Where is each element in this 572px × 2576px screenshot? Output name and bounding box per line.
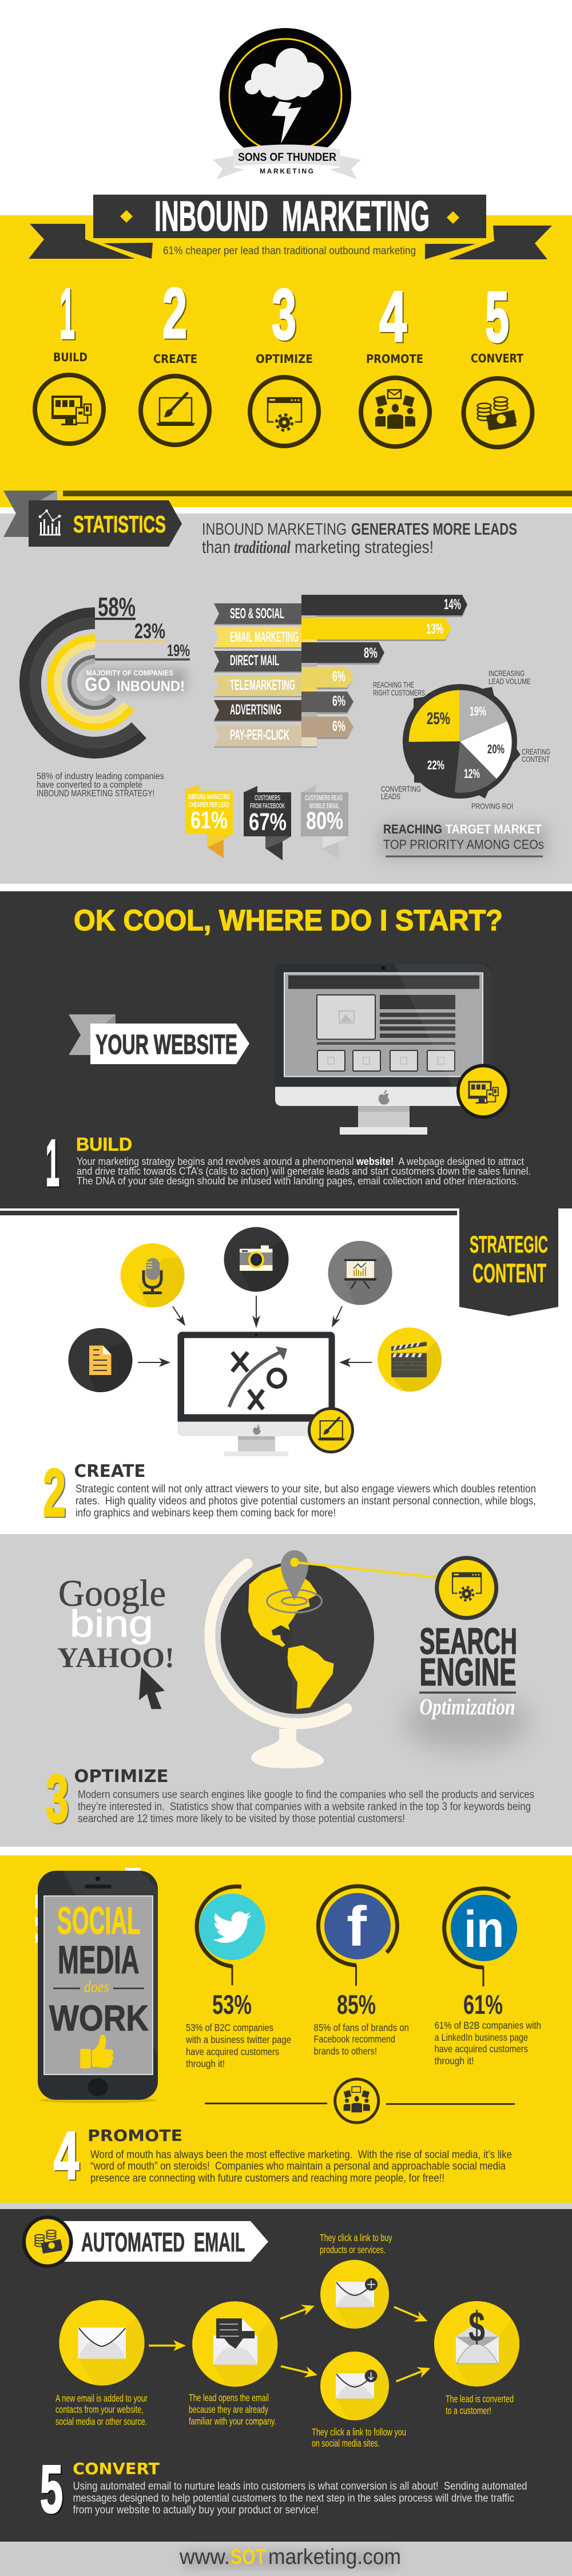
panel: promote: [0, 1855, 572, 2203]
logo: Sons of Thunder Marketing: [213, 28, 361, 179]
stat: linkedin: 61%: [463, 1989, 503, 2020]
ribbon bar chart: 6%: [332, 693, 345, 709]
stat: facebook: 85% of fans of brands on: [313, 2022, 409, 2033]
flow step: click to buy: They click a link to buy: [320, 2232, 392, 2243]
icon: camera: [224, 1227, 288, 1291]
flow step: converted: The lead is converted: [446, 2393, 514, 2404]
icon badge: promote: [205, 2079, 515, 2123]
step 2 text: CREATE: [74, 1461, 145, 1481]
stat: twitter: 53% of B2C companies: [186, 2022, 273, 2033]
step labels: BUILD: [53, 350, 88, 364]
smartphone: social media does work: MEDIA: [58, 1938, 140, 1982]
step numbers: [59, 274, 509, 357]
pie chart: CEO priorities: LEADS: [381, 792, 400, 801]
monitor: website mockup: [275, 964, 491, 1135]
statistics ribbon: STATISTICS: [73, 511, 166, 538]
panel: create: [0, 1208, 572, 1534]
ribbon bar chart: PAY-PER-CLICK: [230, 727, 289, 743]
icon badge: convert: [22, 2215, 73, 2268]
flow step: click to follow: on social media sites.: [312, 2437, 380, 2449]
radial chart: go inbound: GO: [85, 674, 110, 696]
heading: where do I start: OK COOL, WHERE DO I START?: [74, 904, 503, 937]
pie chart: CEO priorities: 20%: [487, 742, 505, 756]
footer url: SOT: [231, 2545, 266, 2569]
step 1 text: The DNA of your site design should be infused with landing pages, email collection and other interactions.: [77, 1175, 519, 1187]
panel: statistics: [0, 491, 572, 884]
pie chart: CEO priorities: 25%: [427, 709, 450, 728]
pie chart: CEO priorities: RIGHT CUSTOMERS: [373, 688, 425, 697]
ribbon bar chart: 13%: [426, 621, 443, 637]
flow step: converted: [434, 2301, 519, 2416]
flow step: converted: to a customer!: [446, 2405, 491, 2416]
pie chart: CEO priorities: INCREASING: [488, 669, 525, 678]
ribbon bar chart: EMAIL MARKETING: [230, 629, 299, 645]
flow step: new email: A new email is added to your: [55, 2393, 148, 2404]
stat: facebook: f: [347, 1895, 367, 1958]
ribbon badge: 61%: [185, 784, 233, 858]
ribbon: automated email: [57, 2221, 268, 2262]
stat: linkedin: in: [464, 1901, 505, 1958]
step 4 text: 4: [54, 2118, 79, 2194]
ribbon bar chart: 6%: [332, 669, 345, 685]
icon: clapperboard: [378, 1327, 442, 1392]
ribbon: strategic content: [459, 1208, 558, 1316]
pie chart: CEO priorities: PROVING ROI: [471, 801, 513, 811]
statistics headline: than: [202, 537, 231, 557]
ribbon badge: 67%: CUSTOMERS: [255, 793, 280, 802]
icon: create: [141, 376, 209, 445]
radial chart: go inbound: [25, 592, 190, 753]
monitor: strategy playbook: [177, 1332, 335, 1456]
step 1 text: BUILD: [76, 1134, 132, 1155]
subtitle: 61% cheaper per lead than traditional outbound marketing: [163, 245, 416, 257]
step numbers: 1: [59, 274, 75, 354]
globe: [210, 1550, 439, 1768]
stat: twitter: have acquired customers: [186, 2046, 279, 2057]
smartphone: social media does work: WORK: [49, 1998, 149, 2038]
ribbon bar chart: SEO & SOCIAL: [230, 606, 284, 622]
stat: twitter: with a business twitter page: [185, 2034, 291, 2045]
statistics ribbon: [3, 491, 182, 547]
ribbon bar chart: 14%: [444, 596, 461, 613]
flow step: new email: [55, 2300, 148, 2427]
smartphone: social media does work: [35, 1868, 158, 2103]
flow step: click to buy: [320, 2232, 392, 2329]
icon badge: create: [309, 1408, 352, 1452]
ribbon badge: 61%: 61%: [190, 807, 228, 834]
text: 58% of companies: 58% of industry leading companies: [37, 772, 164, 781]
step 3 text: searched are 12 times more likely to be visited by those potential customers!: [78, 1813, 405, 1825]
step labels: PROMOTE: [366, 352, 423, 366]
step numbers: 5: [485, 278, 509, 357]
flow step: lead opens email: because they are already: [189, 2404, 268, 2415]
stat: linkedin: 61% of B2B companies with: [435, 2020, 541, 2031]
flow step: click to follow: [312, 2352, 406, 2449]
ribbon bar chart: TELEMARKETING: [230, 677, 295, 693]
icon: optimize: [250, 377, 319, 446]
search engine logos: Google: [58, 1573, 166, 1614]
step 2 text: info graphics and webinars keep them coming back for more!: [76, 1507, 336, 1519]
step 3 text: OPTIMIZE: [74, 1767, 168, 1787]
stat: twitter: through it!: [186, 2058, 225, 2069]
flow step: new email: contacts from your website,: [55, 2404, 144, 2415]
step 1 text: [46, 1127, 531, 1200]
arrows into monitor: [138, 1296, 372, 1367]
pie chart: CEO priorities: CONTENT: [522, 754, 550, 764]
text: 58% of companies: have converted to a complete: [37, 780, 142, 790]
text: 58% of companies: INBOUND MARKETING STRATEGY!: [37, 789, 154, 799]
text: 58% of companies: [37, 772, 164, 799]
panel: optimize: [0, 1534, 572, 1847]
stat: linkedin: through it!: [435, 2055, 474, 2067]
step 5 text: messages designed to help potential customers to the next step in the sales process will drive the traffic: [73, 2492, 514, 2504]
panel: footer: [0, 2542, 572, 2576]
icon: thumbs up: [80, 2034, 113, 2068]
flow step: lead opens email: [189, 2301, 277, 2427]
stat: linkedin: [435, 1888, 541, 2067]
ribbon: your website: YOUR WEBSITE: [96, 1030, 237, 1060]
icon badge: optimize: [435, 1556, 498, 1620]
heading: search engine optimization: Optimization: [420, 1694, 515, 1720]
step numbers: 2: [162, 274, 187, 353]
stat: facebook: Facebook recommend: [313, 2033, 395, 2045]
step 3 text: 3: [46, 1761, 69, 1836]
ribbon bar chart: 6%: [332, 718, 345, 734]
search engine logos: [57, 1573, 174, 1673]
heading: search engine optimization: [404, 1621, 530, 1751]
step labels: CONVERT: [471, 351, 523, 365]
step 2 text: [43, 1455, 536, 1531]
heading: search engine optimization: SEARCH: [420, 1621, 517, 1662]
step 4 text: PROMOTE: [88, 2126, 182, 2145]
step 4 text: presence are connecting with future customers and reaching more people, for free!!: [90, 2172, 444, 2184]
ribbon badge: 61%: CHEAPER PER LEAD: [189, 800, 229, 809]
pie chart: CEO priorities: CONVERTING: [381, 784, 421, 793]
stat: facebook: brands to others!: [313, 2045, 377, 2057]
radial chart: go inbound: 58%: [98, 592, 136, 622]
step 3 text: [46, 1761, 534, 1836]
callout: reaching target market: REACHING: [383, 822, 442, 836]
pie chart: CEO priorities: [373, 669, 550, 811]
radial chart: go inbound: MAJORITY OF COMPANIES: [86, 669, 173, 677]
stat: twitter: [185, 1887, 291, 2069]
ribbon bar chart: [214, 595, 467, 748]
pie chart: CEO priorities: CREATING: [522, 747, 550, 756]
statistics headline: traditional: [234, 537, 291, 557]
flow step: lead opens email: The lead opens the email: [189, 2392, 269, 2403]
step 2 text: Strategic content will not only attract viewers to your site, but also engage viewers which doubles retention: [76, 1483, 536, 1495]
stat: facebook: 85%: [337, 1989, 376, 2020]
ribbon badge: 61%: INBOUND MARKETING: [188, 792, 230, 801]
panel: hero header: [0, 28, 572, 507]
step 5 text: Using automated email to nurture leads into customers is what conversion is all about! Sending automated: [73, 2480, 527, 2492]
step numbers: 4: [379, 277, 407, 357]
logo: Sons of Thunder Marketing: MARKETING: [260, 167, 313, 175]
ribbon: your website: [69, 1014, 249, 1064]
icon: microphone: [121, 1243, 185, 1307]
step labels: [53, 350, 523, 366]
pie chart: CEO priorities: 19%: [470, 704, 486, 718]
pie chart: CEO priorities: 22%: [427, 758, 444, 772]
statistics headline: INBOUND MARKETING: [202, 520, 347, 539]
panel: convert: [0, 2209, 572, 2542]
statistics headline: GENERATES MORE LEADS: [351, 520, 517, 539]
flow step: new email: social media or other source.: [55, 2416, 147, 2427]
ribbon badge: 80%: MOBILE EMAIL: [309, 801, 339, 810]
flow step: converted: $: [468, 2303, 485, 2350]
icon: document: [68, 1328, 132, 1392]
ribbon badge: 67%: 67%: [249, 808, 287, 836]
search engine logos: bing: [70, 1602, 153, 1645]
title ribbon: Inbound Marketing: [29, 192, 552, 259]
divider band: [0, 2203, 572, 2209]
ribbon bar chart: DIRECT MAIL: [230, 653, 279, 669]
flow step: lead opens email: familiar with your company.: [189, 2416, 276, 2427]
radial chart: go inbound: 23%: [134, 619, 165, 643]
flow step: click to buy: products or services.: [320, 2244, 386, 2255]
stat: linkedin: a LinkedIn business page: [435, 2032, 528, 2043]
statistics headline: marketing strategies!: [295, 537, 434, 557]
icon: cursor: [139, 1667, 165, 1709]
stat: linkedin: have acquired customers: [435, 2043, 528, 2055]
step 4 text: “word of mouth” on steroids! Companies who maintain a personal and approachable social media: [90, 2160, 506, 2172]
pie chart: CEO priorities: 12%: [464, 767, 480, 781]
footer url: marketing.com: [268, 2545, 401, 2569]
radial chart: go inbound: INBOUND!: [117, 678, 185, 694]
map pin with connector: [267, 1550, 439, 1613]
step 5 text: [40, 2452, 527, 2527]
icon: twitter bird: [213, 1911, 251, 1943]
icon badge: build: [456, 1064, 510, 1119]
ribbon badge: 67%: [244, 786, 291, 860]
stat: facebook: [313, 1886, 409, 2057]
smartphone: social media does work: does: [84, 1978, 109, 1996]
step labels: CREATE: [153, 352, 197, 366]
step 4 text: Word of mouth has always been the most effective marketing. With the rise of social media, it’s like: [90, 2149, 512, 2161]
ribbon badge: 80%: CUSTOMERS READ: [305, 793, 343, 802]
step numbers: 3: [272, 275, 296, 354]
ribbon badge: 80%: [301, 785, 348, 860]
stat: twitter: 53%: [212, 1989, 252, 2020]
step labels: OPTIMIZE: [256, 352, 313, 366]
flow arrows: [149, 2305, 430, 2381]
ribbon bar chart: 8%: [364, 645, 378, 661]
icon: statistics chart: [39, 509, 61, 536]
callout: reaching target market: TOP PRIORITY AMONG CEOs: [383, 837, 544, 852]
ribbon badge: 67%: FROM FACEBOOK: [250, 801, 285, 810]
ribbon badge: 80%: 80%: [306, 807, 343, 835]
step 5 text: from your website to actually buy your product or service!: [73, 2504, 319, 2516]
step 5 text: CONVERT: [73, 2459, 160, 2478]
search engine logos: YAHOO!: [57, 1641, 174, 1673]
pie chart: CEO priorities: LEAD VOLUME: [488, 677, 531, 686]
pie chart: CEO priorities: REACHING THE: [373, 680, 414, 689]
icon: promote: [361, 378, 430, 447]
callout: reaching target market: TARGET MARKET: [446, 822, 542, 836]
footer url: www.: [179, 2545, 230, 2569]
panel: build: [0, 891, 572, 1208]
step 1 text: 1: [46, 1127, 59, 1200]
statistics headline: [202, 520, 517, 557]
callout: reaching target market: [380, 822, 546, 859]
step 1 text: Your marketing strategy begins and revolves around a phenomenal website! A webpage designed to attract: [77, 1155, 524, 1167]
flow step: click to follow: They click a link to follow you: [312, 2426, 406, 2437]
ribbon: automated email: AUTOMATED EMAIL: [81, 2227, 245, 2257]
radial chart: go inbound: 19%: [167, 642, 190, 660]
heading: search engine optimization: ENGINE: [420, 1650, 516, 1694]
icon: presentation: [328, 1241, 392, 1305]
icon: convert: [463, 378, 532, 447]
ribbon bar chart: ADVERTISING: [230, 702, 281, 718]
step 5 text: 5: [40, 2452, 63, 2527]
step 4 text: [54, 2118, 512, 2194]
step 2 text: 2: [43, 1455, 66, 1531]
smartphone: social media does work: SOCIAL: [57, 1899, 141, 1942]
logo: Sons of Thunder Marketing: SONS OF THUNDER: [238, 151, 336, 164]
icon: build: [35, 375, 104, 444]
